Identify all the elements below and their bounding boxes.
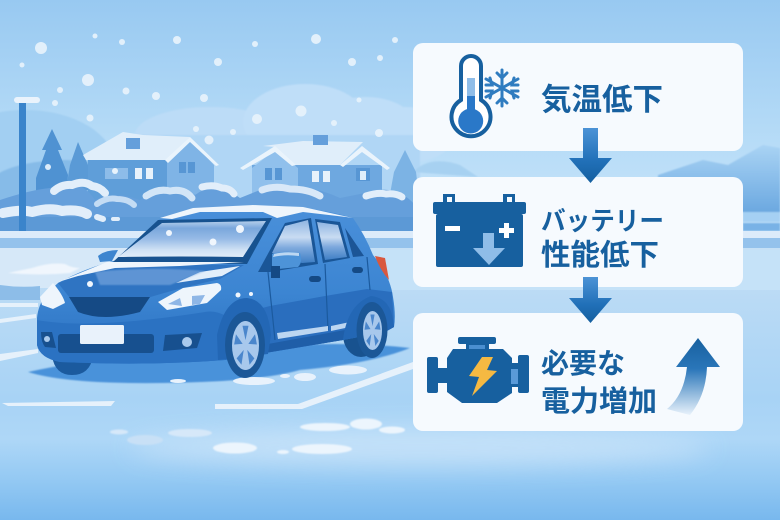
side mirror <box>272 252 301 269</box>
rear wheel <box>356 302 388 358</box>
lower grille <box>58 334 154 353</box>
bumper <box>37 312 226 364</box>
front wheel arch <box>217 298 271 360</box>
house left <box>83 132 219 200</box>
windshield frame <box>113 218 272 264</box>
front left tyre <box>52 356 93 375</box>
icon: battery <box>433 194 526 267</box>
ground snow around car <box>170 366 367 385</box>
fog lamp right <box>163 333 202 351</box>
grille <box>69 297 150 317</box>
icon: thermometer <box>452 56 491 136</box>
icon: rising arrow <box>667 338 720 415</box>
car body <box>37 205 395 364</box>
right headlight <box>158 283 221 310</box>
door lines and handles <box>268 257 370 340</box>
house right <box>240 135 390 203</box>
icon: engine <box>427 337 529 403</box>
snowy roof <box>263 141 363 165</box>
street lamp <box>14 97 40 232</box>
parking lines <box>0 303 413 409</box>
heading: 必要な <box>541 348 625 379</box>
sill <box>265 330 345 353</box>
left headlight <box>40 283 65 309</box>
roof snow <box>160 205 353 219</box>
distant clouds and hills <box>0 84 780 231</box>
front wheel <box>225 312 265 378</box>
trees <box>36 129 420 205</box>
panel: more power required: 電力増加 <box>541 385 657 418</box>
frosted windshield <box>118 221 266 257</box>
car shadow <box>28 344 410 383</box>
snowy bushes <box>0 183 415 232</box>
rear quarter window <box>345 228 364 257</box>
licence plate <box>80 325 124 344</box>
hood <box>58 264 244 298</box>
panel: battery performance drop <box>413 177 743 287</box>
snow flecks on car <box>87 225 253 298</box>
snowy roof <box>83 132 190 160</box>
arrow: temperature to battery <box>569 128 612 183</box>
heading: バッテリー <box>541 206 664 236</box>
side sill trim <box>277 322 350 339</box>
lower snow patches <box>110 418 710 466</box>
lower door shading <box>225 289 394 360</box>
panel: more power required <box>413 313 743 431</box>
rear tyre back <box>343 313 379 357</box>
rear side window <box>315 219 350 263</box>
icon: snowflake <box>486 70 518 106</box>
falling snow <box>20 34 398 170</box>
snowy ground <box>0 232 780 520</box>
far road band <box>0 231 780 300</box>
rear wheel arch <box>343 296 394 340</box>
arrow: battery to power <box>569 277 612 323</box>
hood snow <box>58 262 244 282</box>
sky background <box>0 0 780 240</box>
fog lamp left <box>41 332 56 348</box>
heading: 気温低下 <box>541 83 663 117</box>
car <box>28 205 410 385</box>
front side window <box>258 218 318 272</box>
panel: battery performance drop: 性能低下 <box>541 239 659 272</box>
panel: air temperature drop <box>413 43 743 151</box>
tail light <box>375 256 389 280</box>
